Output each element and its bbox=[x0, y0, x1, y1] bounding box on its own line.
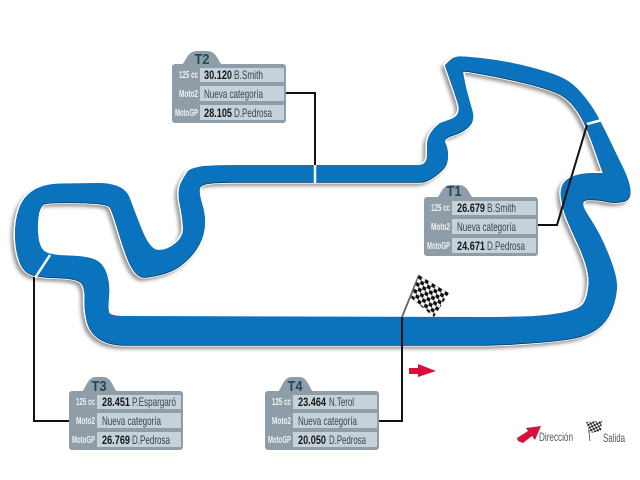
legend: start flag: Salida bbox=[603, 431, 625, 445]
panel: T2: Moto2 bbox=[179, 89, 198, 100]
panel: T1: 24.671 bbox=[457, 239, 485, 253]
panel: T3: 26.769 bbox=[102, 433, 130, 447]
panel: T3: Moto2 bbox=[76, 416, 95, 427]
legend: start flag bbox=[586, 421, 625, 445]
legend: direction: Dirección bbox=[539, 430, 573, 444]
panel: T2: D.Pedrosa bbox=[234, 106, 272, 120]
leader line T3 bbox=[34, 277, 70, 421]
panel: T3: P.Espargaró bbox=[132, 395, 176, 409]
panel: T3: MotoGP bbox=[72, 435, 95, 446]
panel: T2: Nueva categoría bbox=[204, 87, 263, 101]
panel: T1: B.Smith bbox=[487, 201, 516, 215]
leader line T2 bbox=[285, 93, 315, 165]
panel: T3: T3 bbox=[92, 378, 106, 395]
panel: T1: 26.679 bbox=[457, 201, 485, 215]
arrow: track direction bbox=[409, 364, 436, 377]
panel: T1: D.Pedrosa bbox=[487, 239, 525, 253]
panel: T2: 28.105 bbox=[204, 106, 232, 120]
panel: T2: 30.120 bbox=[204, 68, 232, 82]
panel: T1: Moto2 bbox=[431, 222, 450, 233]
panel: T1: 125 cc bbox=[431, 203, 450, 214]
panel: T2: B.Smith bbox=[234, 68, 263, 82]
panel: T4: Nueva categoría bbox=[298, 414, 357, 428]
leader line T4 bbox=[378, 317, 402, 421]
panel: T4: D.Pedrosa bbox=[329, 433, 366, 447]
legend: direction bbox=[517, 426, 573, 444]
panel: T1: Nueva categoría bbox=[457, 220, 516, 234]
panel: T2: 125 cc bbox=[179, 70, 198, 81]
panel: T4: MotoGP bbox=[268, 435, 291, 446]
panel: T4: 125 cc bbox=[272, 397, 291, 408]
panel: T3: Nueva categoría bbox=[102, 414, 161, 428]
panel: T4: 23.464 bbox=[298, 395, 326, 409]
panel: T3: 125 cc bbox=[76, 397, 95, 408]
panel: T4: T4 bbox=[288, 378, 303, 395]
icon: start flag bbox=[402, 275, 449, 317]
panel: T4: Moto2 bbox=[272, 416, 291, 427]
panel: T3: D.Pedrosa bbox=[132, 433, 170, 447]
panel: T3: 28.451 bbox=[102, 395, 130, 409]
panel: T4: N.Terol bbox=[329, 395, 354, 409]
panel: T1 bbox=[424, 183, 538, 256]
leader line T1 bbox=[537, 125, 587, 225]
panel: T4 bbox=[265, 377, 379, 450]
panel: T2: MotoGP bbox=[175, 108, 198, 119]
race track circuit bbox=[12, 56, 631, 348]
panel: T1: T1 bbox=[446, 183, 462, 200]
panel: T2: T2 bbox=[194, 51, 210, 68]
panel: T2 bbox=[172, 51, 286, 123]
panel: T4: 20.050 bbox=[298, 433, 326, 447]
panel: T3 bbox=[69, 377, 183, 450]
panel: T1: MotoGP bbox=[427, 241, 450, 252]
